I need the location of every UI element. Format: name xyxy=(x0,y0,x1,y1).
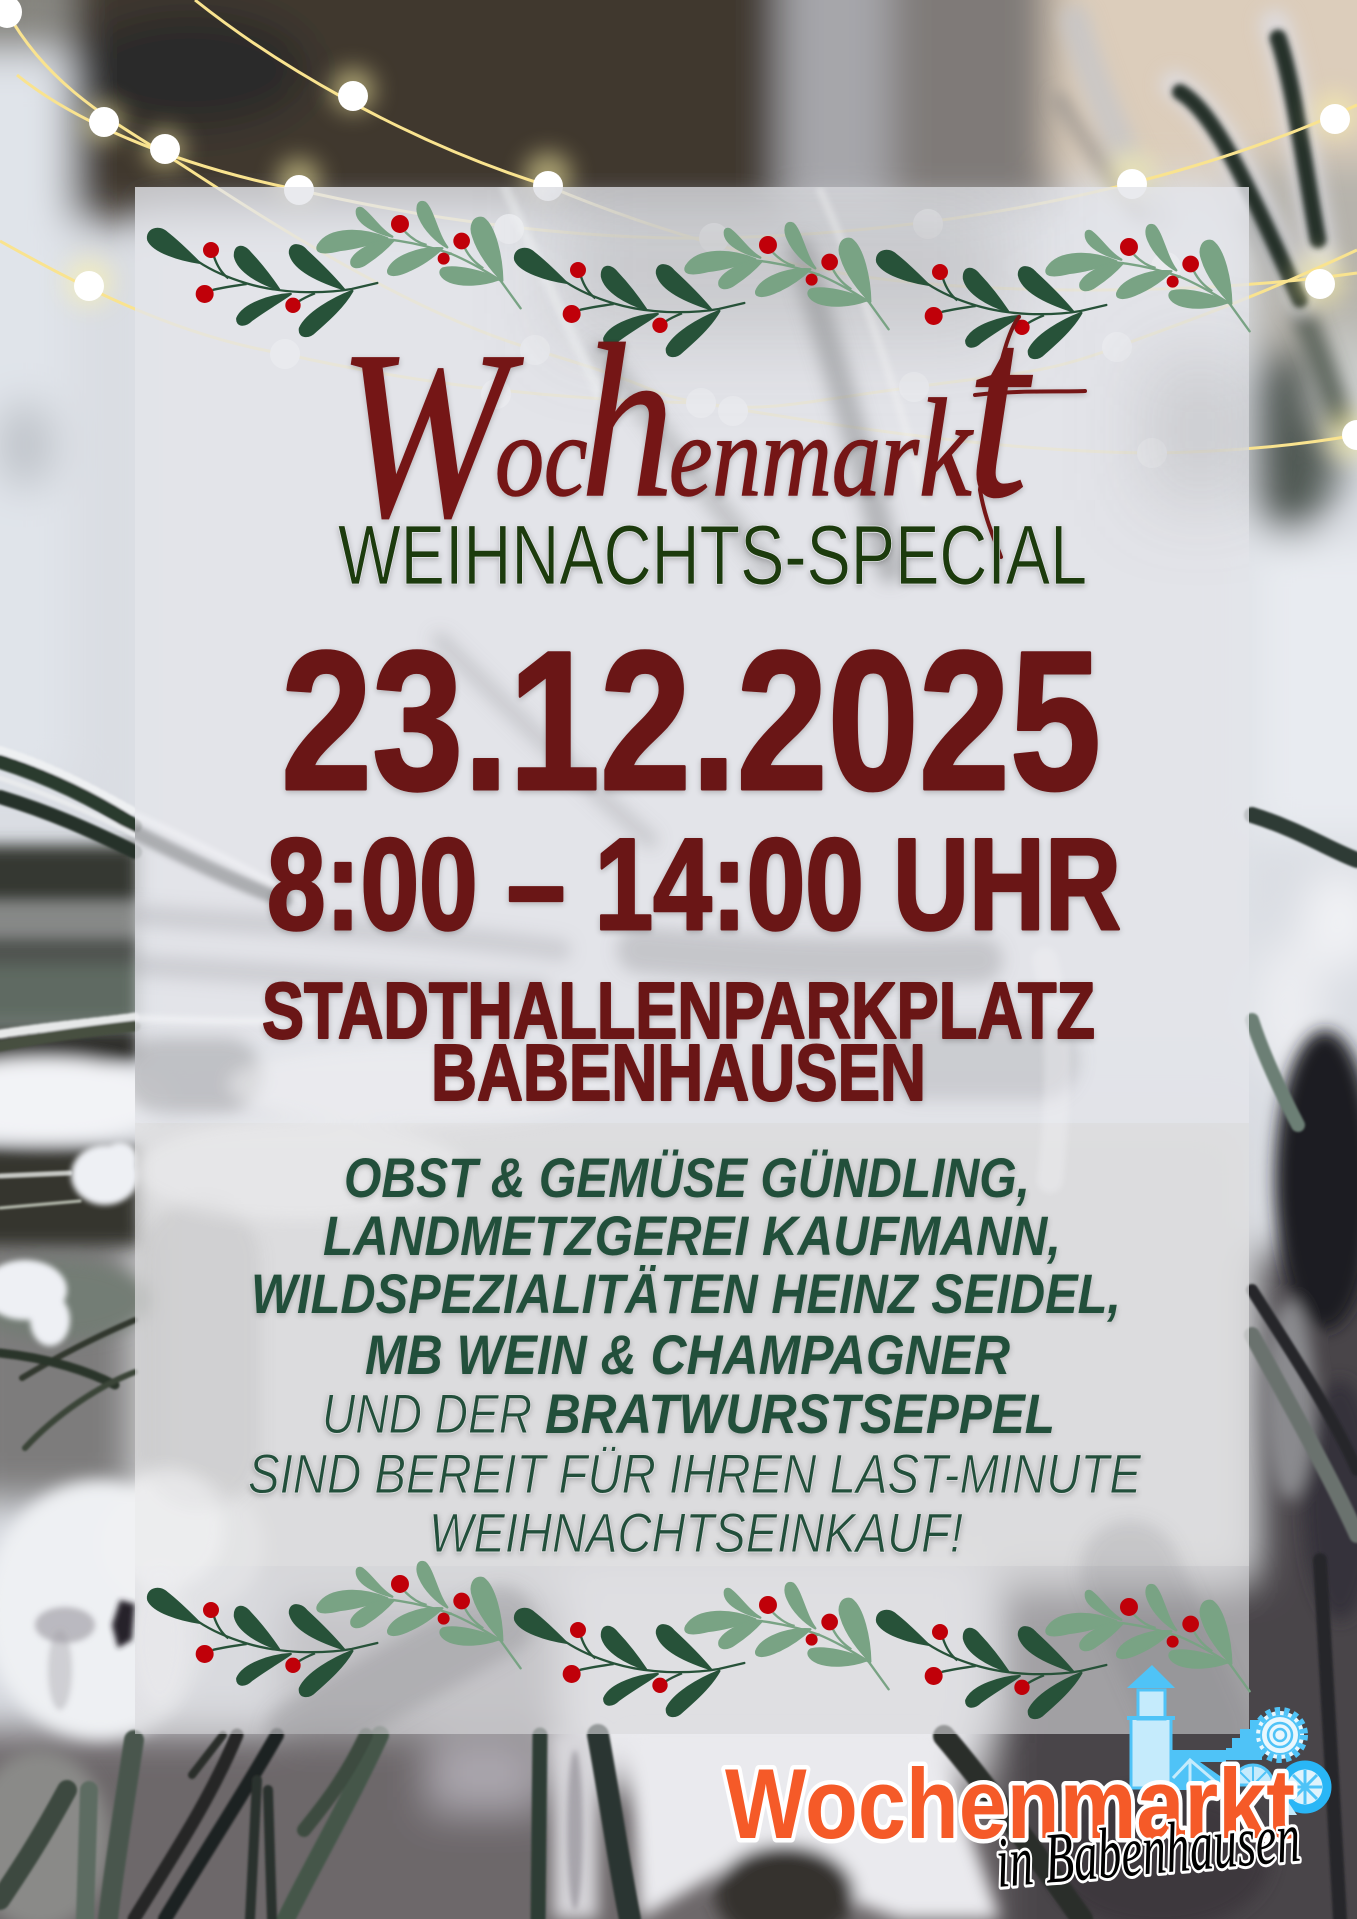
vendor list: OBST & GEMÜSE GÜNDLING, xyxy=(344,1146,1030,1209)
vendor list xyxy=(248,1146,1142,1564)
icon: tower xyxy=(1127,1665,1240,1790)
icon: wheels xyxy=(1233,1765,1327,1815)
time: 8:00 – 14:00 UHR xyxy=(267,811,1121,957)
location xyxy=(262,966,1095,1117)
snow speckle and frost clusters xyxy=(0,1142,583,1910)
panel: needles seen through the overlay xyxy=(105,150,1250,1734)
title: Wochenmarkt xyxy=(338,264,1085,568)
blurred needles upper right xyxy=(1060,20,1340,420)
location: BABENHAUSEN xyxy=(431,1028,926,1117)
title: Wochenmarkt: oc xyxy=(495,394,587,521)
bottom garland xyxy=(148,1562,1250,1718)
string lights xyxy=(0,0,1357,468)
title: Wochenmarkt: W xyxy=(338,303,524,568)
vendor list: UND DER xyxy=(322,1382,532,1445)
title: Wochenmarkt: henmarkt xyxy=(581,264,1028,552)
logo: Wochenmarkt in Babenhausen xyxy=(725,1665,1327,1903)
panel: translucent overlay xyxy=(135,187,1249,1734)
vendor list: WILDSPEZIALITÄTEN HEINZ SEIDEL, xyxy=(251,1262,1121,1325)
vendor list: BRATWURSTSEPPEL xyxy=(545,1382,1055,1445)
top garland xyxy=(148,202,1250,358)
vendor list: LANDMETZGEREI KAUFMANN, xyxy=(323,1204,1061,1267)
vendor list: SIND BEREIT FÜR IHREN LAST-MINUTE xyxy=(248,1442,1142,1505)
vendor list: MB WEIN & CHAMPAGNER xyxy=(365,1323,1010,1386)
vendor list: WEIHNACHTSEINKAUF! xyxy=(429,1501,963,1564)
icon: gear and stairs xyxy=(1226,1711,1304,1760)
sharp needles and frost outside the panel xyxy=(0,750,1357,1919)
location: STADTHALLENPARKPLATZ xyxy=(262,966,1095,1055)
subtitle: WEIHNACHTS-SPECIAL xyxy=(338,508,1087,602)
date: 23.12.2025 xyxy=(281,610,1101,831)
